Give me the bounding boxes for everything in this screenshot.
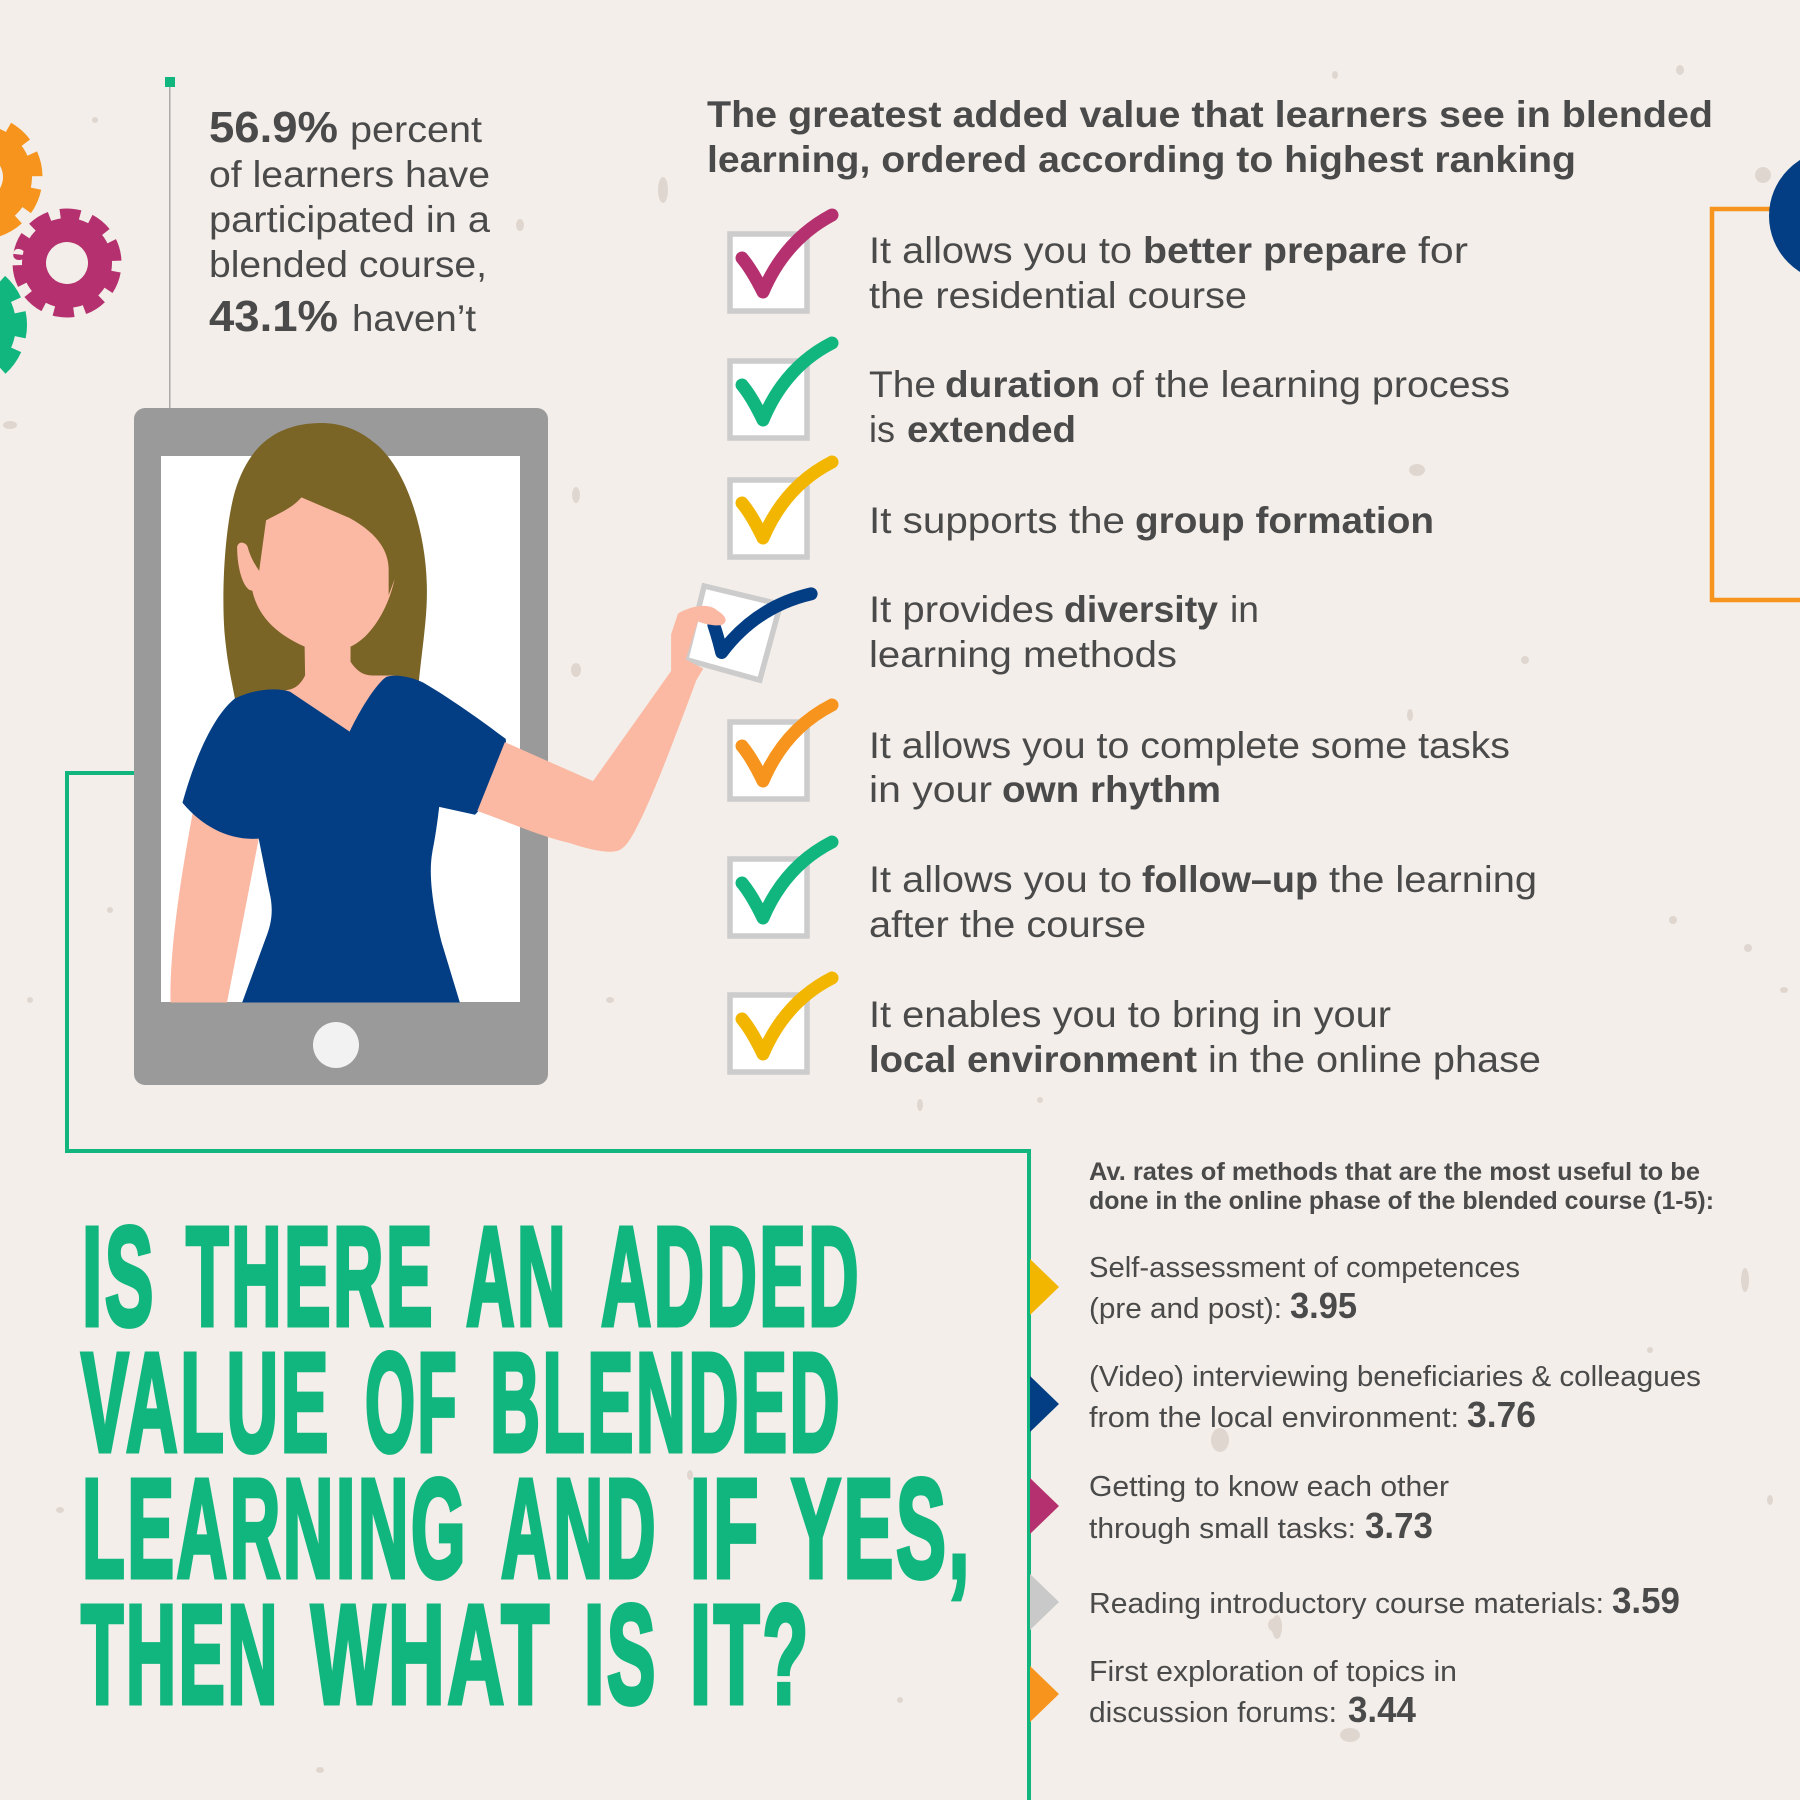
label: The (869, 364, 936, 405)
label: discussion forums: (1089, 1697, 1337, 1729)
label: (Video) interviewing beneficiaries & colleagues (1089, 1361, 1701, 1393)
rate item: getting to know (1030, 1471, 1449, 1546)
label: 3.76 (1467, 1394, 1536, 1435)
check mark (742, 842, 832, 918)
checklist item 4 label: learning methods (869, 634, 1177, 675)
marker: blue triangle (1030, 1376, 1059, 1432)
title (81, 1197, 972, 1733)
label (869, 725, 1510, 810)
checkbox (730, 480, 807, 557)
label: follow–up (1142, 859, 1318, 900)
label: is (869, 409, 895, 450)
tablet body (134, 408, 548, 1085)
icon: gears (0, 111, 124, 395)
icon: blue circle (1769, 150, 1800, 282)
checklist item 6 (730, 842, 1537, 945)
frame: orange outline (1712, 209, 1800, 600)
check mark (742, 343, 832, 420)
checklist item 3 (730, 462, 1434, 557)
title: AN (466, 1197, 568, 1355)
tablet screen (161, 456, 520, 1002)
icon: orange gear (0, 111, 46, 243)
label: own rhythm (1002, 769, 1221, 810)
label (869, 500, 1434, 541)
checklist item 5 (730, 705, 1510, 810)
checkbox (730, 361, 807, 438)
checklist item 4 label: It provides (869, 589, 1054, 630)
marker: orange triangle (1030, 1666, 1059, 1722)
title: THERE (186, 1197, 435, 1355)
label: Getting to know each other (1089, 1471, 1449, 1503)
label: extended (907, 409, 1076, 450)
woman (170, 423, 506, 1003)
shirt (182, 676, 506, 1003)
marker: green square and line (165, 77, 175, 409)
label (1089, 1656, 1457, 1730)
label (869, 230, 1468, 316)
label: in the online phase (1208, 1039, 1541, 1080)
label: Reading introductory course materials: (1089, 1588, 1604, 1620)
title: THEN (81, 1575, 280, 1733)
label (1089, 1580, 1680, 1621)
text block: participation stats (209, 103, 490, 341)
title: VALUE (81, 1323, 331, 1481)
checklist item 4 label: in (1230, 589, 1259, 630)
check mark (742, 462, 832, 538)
check mark (742, 978, 832, 1054)
heading: average rates (1089, 1158, 1714, 1215)
marker: magenta triangle (1030, 1478, 1059, 1534)
title: AND (501, 1449, 658, 1607)
marker: yellow triangle (1030, 1259, 1059, 1315)
text block: participation stats: blended course, (209, 244, 487, 285)
label: 3.59 (1612, 1580, 1680, 1621)
label: better prepare (1143, 230, 1407, 271)
title: IT? (690, 1575, 811, 1733)
rate item: video interviewing (1030, 1361, 1701, 1435)
label: Self-assessment of competences (1089, 1252, 1520, 1284)
text block: participation stats: haven’t (352, 298, 477, 339)
label: First exploration of topics in (1089, 1656, 1457, 1688)
text block: participation stats: percent (350, 109, 483, 150)
label: It allows you to complete some tasks (869, 725, 1510, 766)
checkbox (730, 234, 807, 311)
heading: greatest added value (707, 94, 1713, 180)
label: in your (869, 769, 992, 810)
label (869, 364, 1510, 450)
blue check mark (714, 594, 811, 653)
rate item: reading materials (1030, 1574, 1680, 1630)
left arm (170, 809, 260, 1003)
arm and hand (477, 606, 726, 852)
label (1089, 1471, 1449, 1546)
hair (223, 423, 427, 703)
checkbox (730, 995, 807, 1072)
checkbox (730, 722, 807, 799)
label: through small tasks: (1089, 1513, 1356, 1545)
title: OF (365, 1323, 459, 1481)
title: LEARNING (82, 1449, 468, 1607)
checkbox (730, 859, 807, 936)
label: It allows you to (869, 230, 1132, 271)
icon: magenta gear (10, 206, 124, 320)
label (1089, 1252, 1520, 1326)
checklist item 1 (730, 215, 1468, 316)
rate item: discussion forums (1030, 1656, 1457, 1730)
label: from the local environment: (1089, 1402, 1459, 1434)
label (869, 994, 1541, 1080)
title: WHAT (311, 1575, 552, 1733)
face and neck (237, 497, 396, 735)
text block: participation stats: 56.9% (209, 103, 338, 152)
label: group formation (1135, 500, 1434, 541)
illustration: tablet with woman (134, 408, 548, 1085)
check mark (742, 705, 832, 781)
label: 3.73 (1365, 1505, 1433, 1546)
tablet home button (313, 1022, 359, 1068)
title: ADDED (601, 1197, 861, 1355)
label: (pre and post): (1089, 1293, 1282, 1325)
checklist item 2 (730, 343, 1510, 450)
heading: greatest added value: learning, ordered according to highest ranking (707, 139, 1576, 180)
label: It allows you to (869, 859, 1132, 900)
label: the residential course (869, 275, 1247, 316)
raised arm holding checkbox (477, 586, 811, 852)
label: after the course (869, 904, 1146, 945)
label: the learning (1329, 859, 1537, 900)
text block: participation stats: 43.1% (209, 292, 338, 341)
label: of the learning process (1111, 364, 1510, 405)
label: 3.44 (1348, 1689, 1416, 1730)
marker: grey triangle (1030, 1574, 1059, 1630)
title: IF (690, 1449, 761, 1607)
icon: green gear (0, 255, 31, 395)
checklist item 4 label (869, 589, 1259, 675)
label (1089, 1361, 1701, 1435)
title: IS (82, 1197, 156, 1355)
title: IS (584, 1575, 658, 1733)
text block: participation stats: participated in a (209, 199, 490, 240)
title: BLENDED (490, 1323, 842, 1481)
checklist item 4 label: diversity (1064, 589, 1218, 630)
label: It supports the (869, 500, 1125, 541)
label: It enables you to bring in your (869, 994, 1391, 1035)
label: for (1418, 230, 1468, 271)
label: 3.95 (1290, 1285, 1357, 1326)
label: duration (945, 364, 1100, 405)
text block: participation stats: of learners have (209, 154, 490, 195)
title: YES, (791, 1449, 972, 1607)
rate item: self-assessment (1030, 1252, 1520, 1326)
checkbox card (686, 586, 780, 680)
label: local environment (869, 1039, 1197, 1080)
heading: greatest added value: The greatest added value that learners see in blended (707, 94, 1713, 135)
frame: green outline (67, 773, 1029, 1800)
label (869, 859, 1537, 945)
checklist item 7 (730, 978, 1541, 1080)
check mark (742, 215, 832, 292)
heading: average rates: Av. rates of methods that are the most useful to be (1089, 1158, 1700, 1186)
heading: average rates: done in the online phase of the blended course (1-5): (1089, 1187, 1714, 1215)
